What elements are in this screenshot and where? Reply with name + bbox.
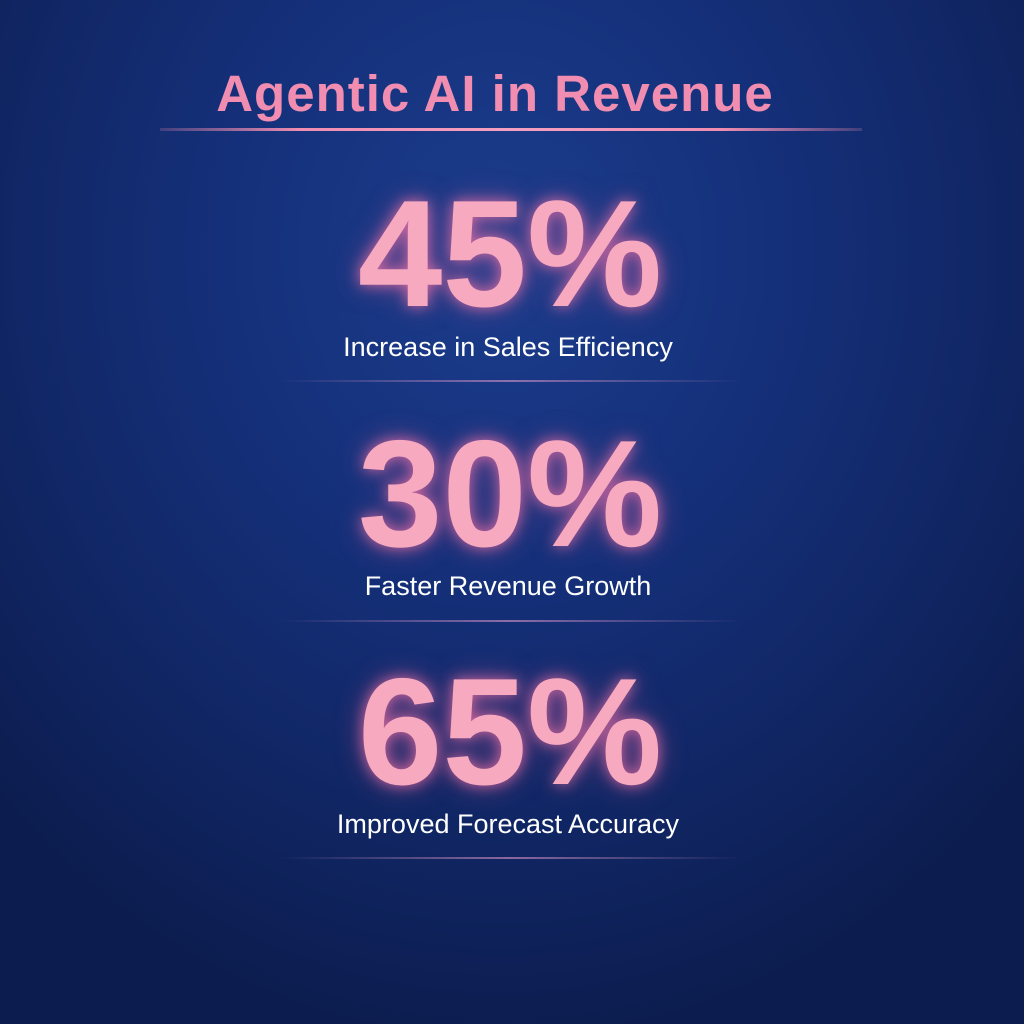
title: Agentic AI in Revenue xyxy=(216,65,774,122)
title underline xyxy=(160,128,862,131)
label: sales efficiency: Increase in Sales Efficiency xyxy=(343,332,673,362)
stat: 65%: 65% xyxy=(358,647,662,817)
stat: 45%: 45% xyxy=(358,169,662,339)
label: forecast accuracy: Improved Forecast Accuracy xyxy=(337,809,679,839)
stat: 30%: 30% xyxy=(358,409,662,579)
label: revenue growth: Faster Revenue Growth xyxy=(365,571,651,601)
